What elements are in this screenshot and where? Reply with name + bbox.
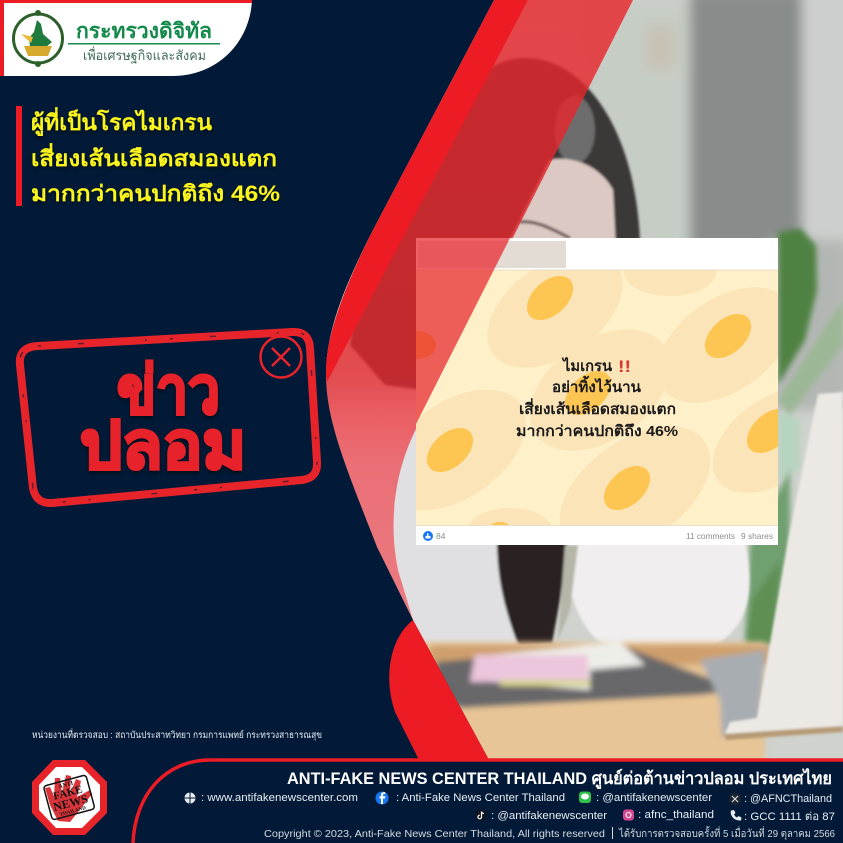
- stamp text: ข่าว: [117, 353, 220, 427]
- post text: เสี่ยงเส้นเลือดสมองแตก: [519, 398, 676, 418]
- headline block: เสี่ยงเส้นเลือดสมองแตก: [31, 142, 277, 171]
- icon: instagram: [623, 810, 634, 820]
- red rounded shape at bottom of navy panel: [389, 620, 489, 760]
- tag with logo text: THAILAND: [59, 806, 87, 818]
- icon: line: [579, 792, 591, 803]
- blurred profile area: [418, 241, 566, 268]
- headline block: มากกว่าคนปกติถึง 46%: [31, 181, 280, 206]
- icon: tiktok: [476, 810, 486, 820]
- laptop: [723, 392, 843, 740]
- translucent red diagonal band: [318, 0, 633, 620]
- tag with logo text: [43, 775, 95, 820]
- headline block: [16, 106, 280, 206]
- contact row one: : @antifakenewscenter: [596, 792, 712, 804]
- shirt: [436, 545, 752, 645]
- post text: !!: [618, 357, 631, 376]
- contact row one: : @AFNCThailand: [744, 793, 832, 805]
- copyright line: Copyright © 2023, Anti-Fake News Center Thailand, All rights reserved: [264, 828, 605, 840]
- icon: red hand: [45, 775, 92, 822]
- icon: globe: [184, 792, 196, 804]
- contact row two: : afnc_thailand: [638, 809, 714, 821]
- icon: facebook: [376, 792, 388, 804]
- post text: [516, 356, 678, 440]
- footer band: [133, 760, 843, 843]
- icon: x: [729, 793, 741, 805]
- post text: ไมเกรน: [561, 356, 613, 375]
- source agency note: หน่วยงานที่ตรวจสอบ : สถาบันประสาทวิทยา กรมการแพทย์ กระทรวงสาธารณสุข: [32, 728, 322, 741]
- icon: phone: [731, 810, 742, 821]
- ministry name: กระทรวงดิจิทัล: [76, 20, 212, 43]
- hair: [350, 58, 640, 400]
- footer title: ANTI-FAKE NEWS CENTER THAILAND ศูนย์ต่อต้านข่าวปลอม ประเทศไทย: [287, 768, 832, 790]
- post text: อย่าทิ้งไว้นาน: [552, 375, 642, 396]
- headline block: ผู้ที่เป็นโรคไมเกรน: [31, 106, 212, 137]
- post text: มากกว่าคนปกติถึง 46%: [516, 422, 678, 440]
- tag with logo text: NEWS: [52, 791, 90, 814]
- bright red diagonal stripe: [326, 0, 528, 382]
- tag with logo text: ANTI: [58, 780, 75, 790]
- reaction counts: 84: [436, 531, 446, 541]
- navy panel with curved edge: [0, 0, 494, 760]
- red overlay across the card corner: [416, 238, 510, 424]
- facebook post card: 9 shares: [741, 531, 773, 541]
- icon: ministry emblem: [14, 10, 62, 67]
- ministry subtitle: เพื่อเศรษฐกิจและสังคม: [83, 46, 206, 64]
- facebook post card: 11 comments: [686, 531, 735, 541]
- contact row one: [201, 792, 832, 805]
- contact row two: [491, 809, 835, 823]
- contact row two: : @antifakenewscenter: [491, 810, 607, 822]
- fake news stamp: [20, 332, 317, 503]
- contact row one: : www.antifakenewscenter.com: [201, 792, 358, 804]
- tag with logo text: FAKE: [52, 783, 84, 803]
- contact row one: : Anti-Fake News Center Thailand: [396, 792, 565, 804]
- desk, tablet and laptop: [420, 642, 770, 762]
- fake news stamp: ปลอม: [80, 408, 246, 482]
- photo: woman resting head on desk: [300, 0, 843, 762]
- contact row two: : GCC 1111 ต่อ 87: [744, 811, 835, 823]
- logo panel: ministry of digital economy and society: [0, 0, 252, 76]
- icon: x in circle: [260, 336, 302, 378]
- facebook post card: [416, 238, 778, 545]
- icon: like: [423, 531, 433, 541]
- post background with egg pattern: [416, 270, 778, 525]
- anti-fake news thailand logo: [32, 760, 107, 835]
